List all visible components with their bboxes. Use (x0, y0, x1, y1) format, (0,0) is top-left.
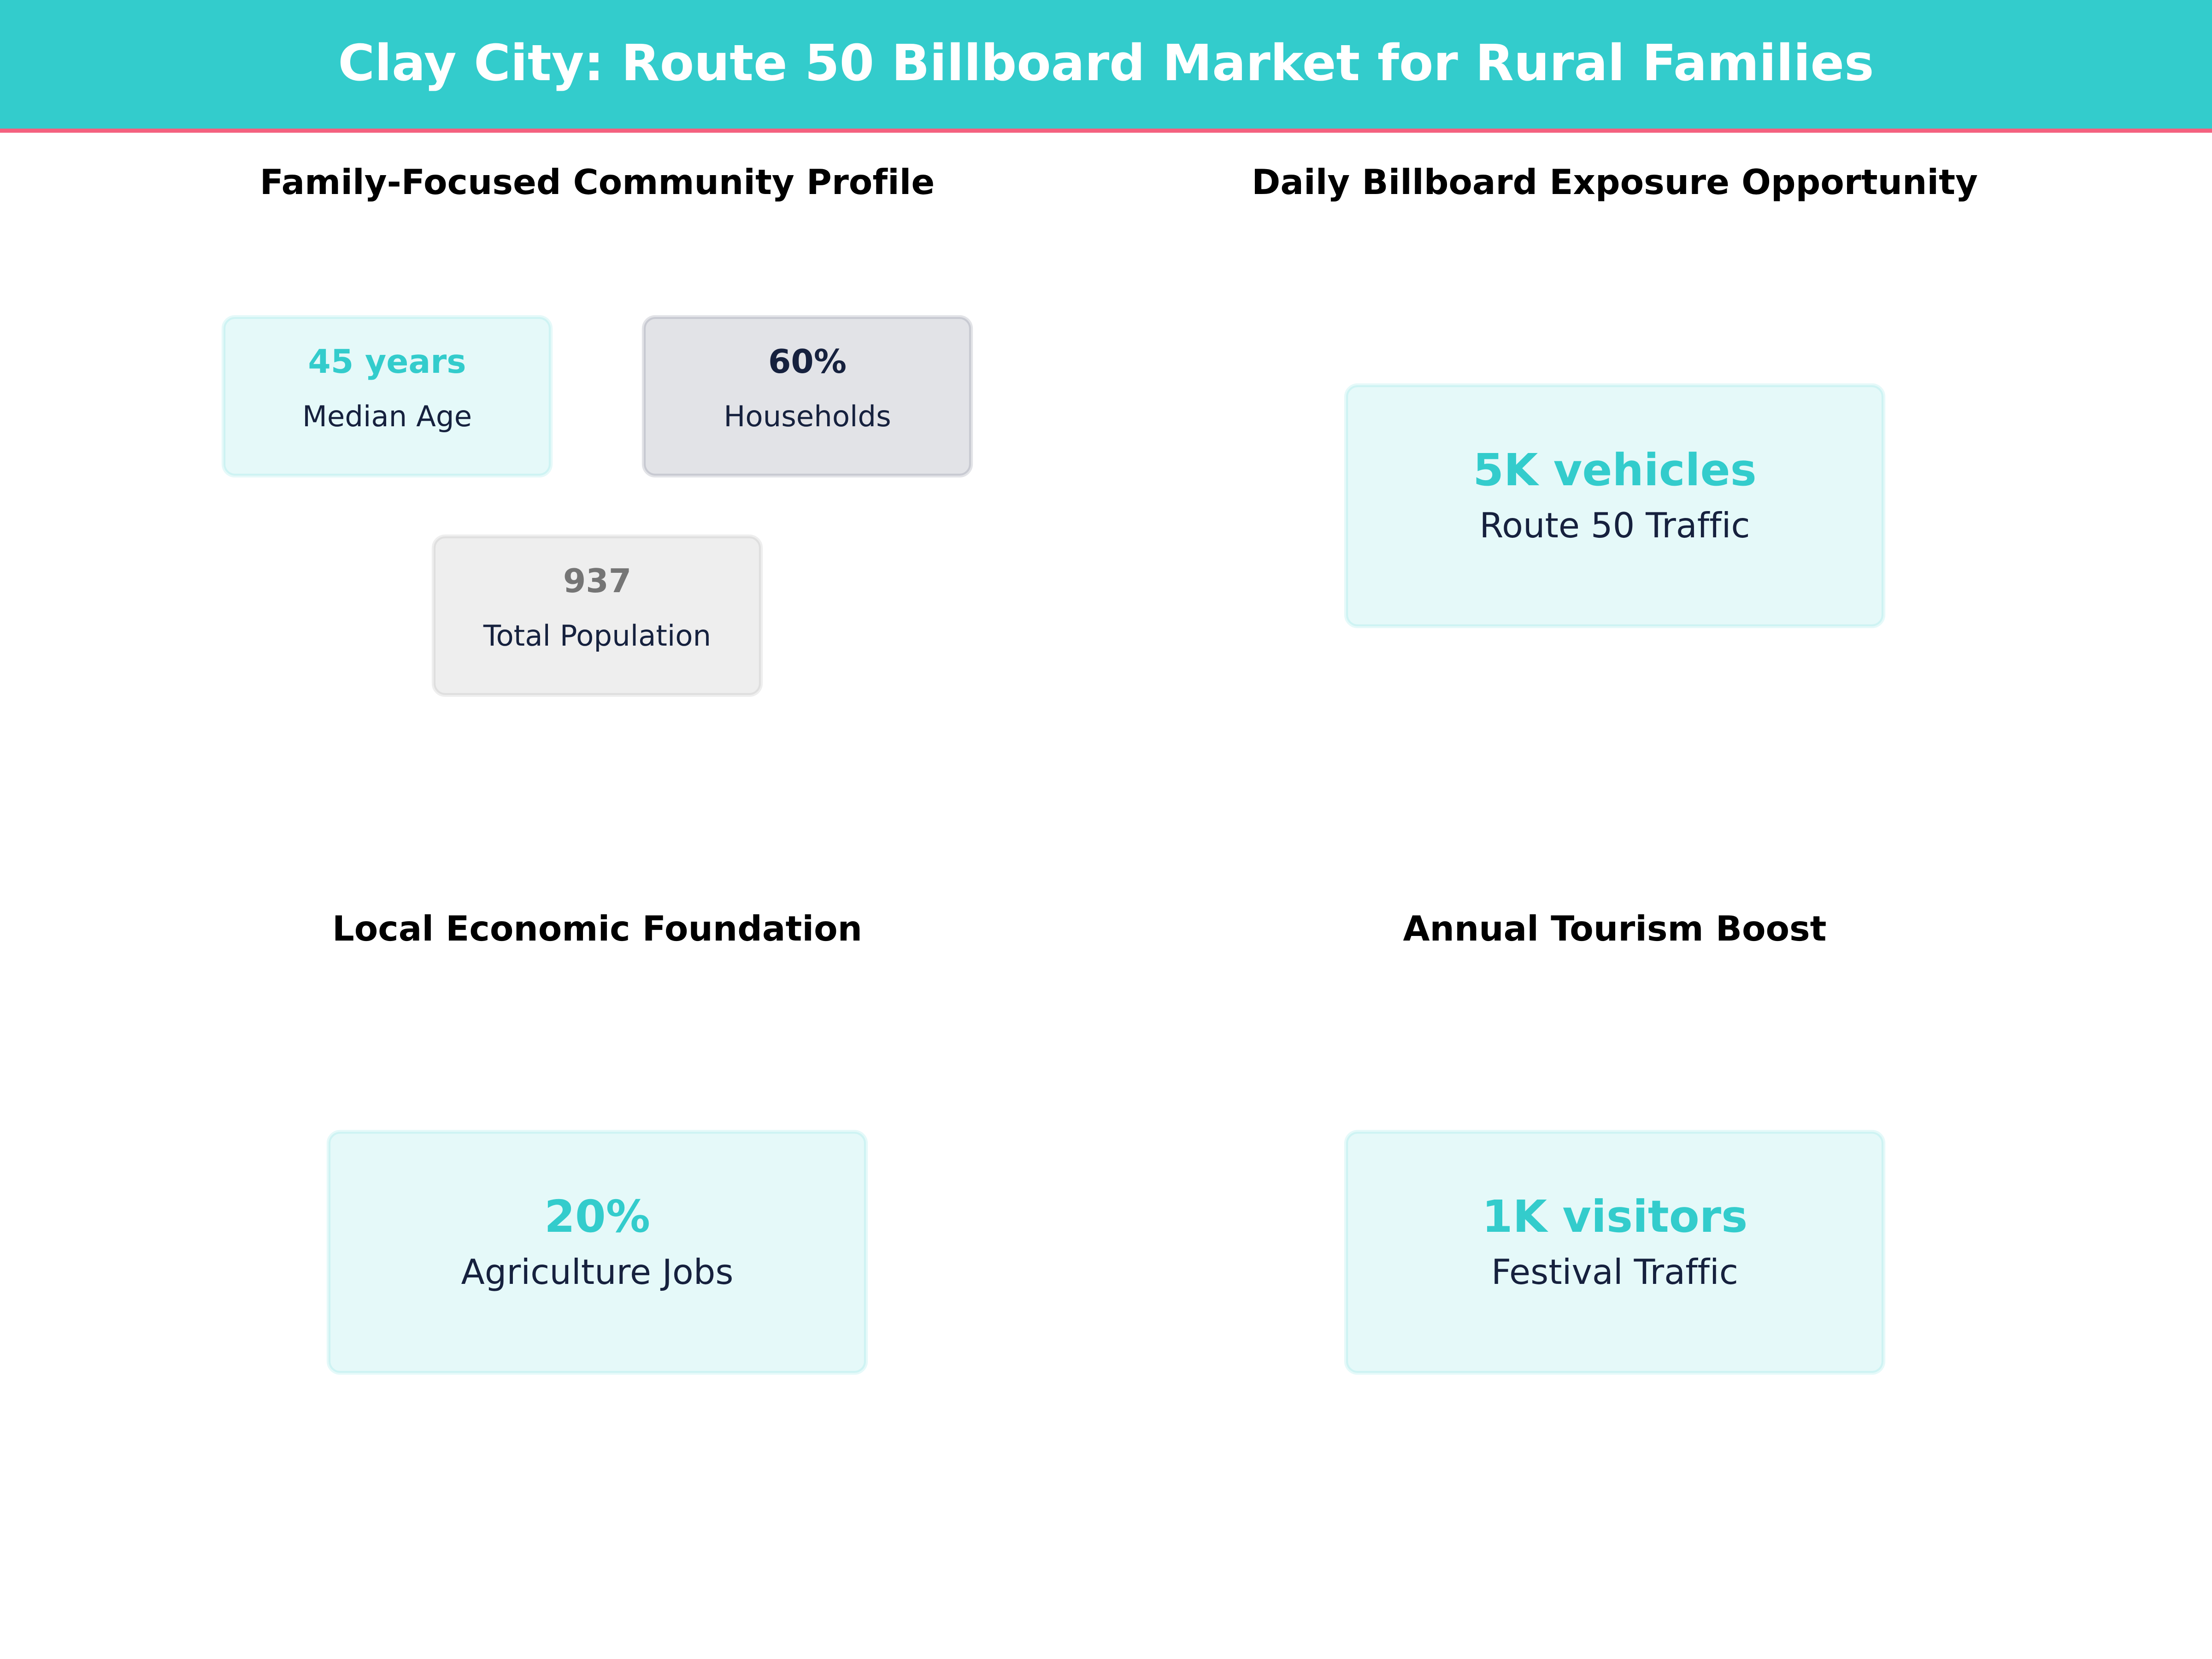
card: festival traffic (1346, 1132, 1883, 1373)
card: festival traffic: 1K visitors (1482, 1191, 1747, 1242)
card: median age: Median Age (302, 400, 472, 433)
card: households (644, 317, 971, 476)
card: festival traffic: Festival Traffic (1491, 1252, 1738, 1292)
heading: economic foundation: Local Economic Foundation (332, 908, 862, 949)
panel: tourism boost (1346, 908, 1883, 1373)
heading: community profile: Family-Focused Community Profile (260, 162, 935, 202)
card: median age (224, 317, 551, 476)
title: Clay City: Route 50 Billboard Market for Rural Families (338, 34, 1874, 92)
card: agriculture jobs (329, 1132, 866, 1373)
card: total population (434, 536, 761, 695)
header banner (0, 0, 2212, 133)
card: total population: Total Population (483, 619, 711, 653)
panel: economic foundation (329, 908, 866, 1373)
card: agriculture jobs: Agriculture Jobs (461, 1252, 734, 1292)
card: total population: 937 (563, 562, 631, 600)
card: route 50 traffic: 5K vehicles (1473, 444, 1757, 496)
card: agriculture jobs: 20% (544, 1191, 650, 1242)
card: households: Households (724, 400, 891, 433)
card: route 50 traffic: Route 50 Traffic (1479, 505, 1750, 546)
card: route 50 traffic (1346, 385, 1883, 626)
panel: billboard exposure (1252, 162, 1978, 626)
panel: community profile (224, 162, 971, 695)
heading: billboard exposure: Daily Billboard Exposure Opportunity (1252, 162, 1978, 202)
card: median age: 45 years (308, 342, 466, 381)
card: households: 60% (768, 342, 847, 381)
heading: tourism boost: Annual Tourism Boost (1403, 908, 1827, 949)
